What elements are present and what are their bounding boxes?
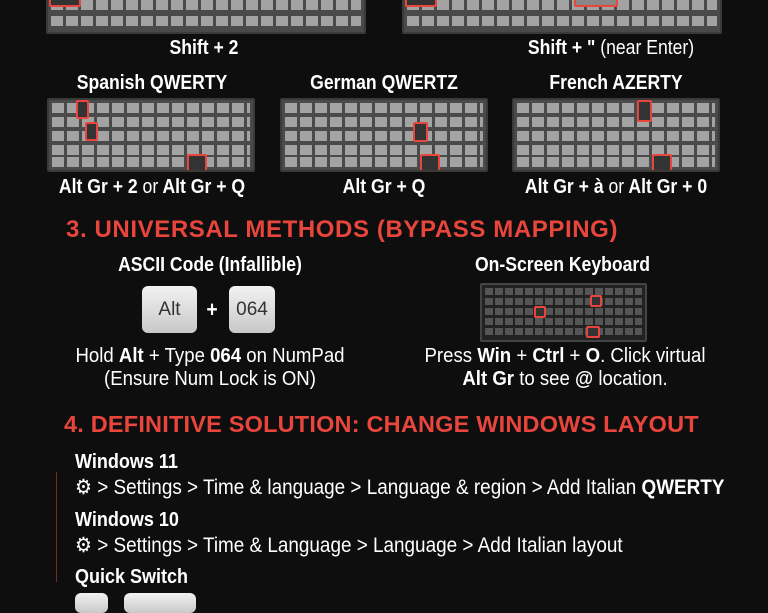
caption: shift 2: Shift + 2 xyxy=(170,37,238,59)
instruction text: (Ensure Num Lock is ON) xyxy=(104,368,316,390)
caption: shift quote: Shift + " (near Enter) xyxy=(528,37,694,59)
key: Alt xyxy=(142,286,197,333)
plus sign: + xyxy=(206,297,218,322)
step: Windows 11: Windows 11 xyxy=(75,451,178,473)
panel: on-screen keyboard xyxy=(424,254,705,390)
keyboard: top left xyxy=(46,0,366,34)
panel: ASCII code xyxy=(75,254,345,390)
tree connector xyxy=(56,472,61,582)
keyboard: German xyxy=(280,98,488,172)
keyboard: top right xyxy=(402,0,722,34)
instruction text: Alt Gr to see @ location. xyxy=(462,368,668,390)
section 3 heading: 3. UNIVERSAL METHODS (BYPASS MAPPING) xyxy=(66,216,618,243)
instruction text xyxy=(424,345,705,390)
keyboard: French xyxy=(512,98,720,172)
caption: German: Alt Gr + Q xyxy=(343,176,425,198)
instruction text: Press Win + Ctrl + O. Click virtual xyxy=(424,345,705,367)
keyboard: Spanish xyxy=(47,98,255,172)
heading: French: French AZERTY xyxy=(549,72,683,94)
key: 064: 064 xyxy=(236,298,268,320)
key: 064 xyxy=(229,286,275,333)
subheading: ASCII: ASCII Code (Infallible) xyxy=(118,254,302,276)
heading: German: German QWERTZ xyxy=(310,72,458,94)
step: Windows 10: Windows 10 xyxy=(75,509,179,531)
caption: French: Alt Gr + à or Alt Gr + 0 xyxy=(525,176,707,198)
OSK image xyxy=(480,283,647,342)
caption: Spanish: Alt Gr + 2 or Alt Gr + Q xyxy=(59,176,245,198)
step: Quick Switch: Quick Switch xyxy=(75,566,188,588)
instruction text: Hold Alt + Type 064 on NumPad xyxy=(75,345,345,367)
step: Windows 11 xyxy=(75,451,724,499)
instruction text xyxy=(75,345,345,390)
heading: Spanish: Spanish QWERTY xyxy=(77,72,227,94)
step: Windows 11: ⚙ > Settings > Time & language > Language & region > Add Italian QWERTY xyxy=(75,476,724,499)
subheading: OSK: On-Screen Keyboard xyxy=(475,254,650,276)
key: Alt: Alt xyxy=(158,298,181,320)
step: Windows 10 xyxy=(75,509,623,557)
step: Quick Switch xyxy=(75,566,196,613)
section 4 heading: 4. DEFINITIVE SOLUTION: CHANGE WINDOWS LAYOUT xyxy=(64,411,699,437)
step: Windows 10: ⚙ > Settings > Time & Language > Language > Add Italian layout xyxy=(75,534,623,557)
